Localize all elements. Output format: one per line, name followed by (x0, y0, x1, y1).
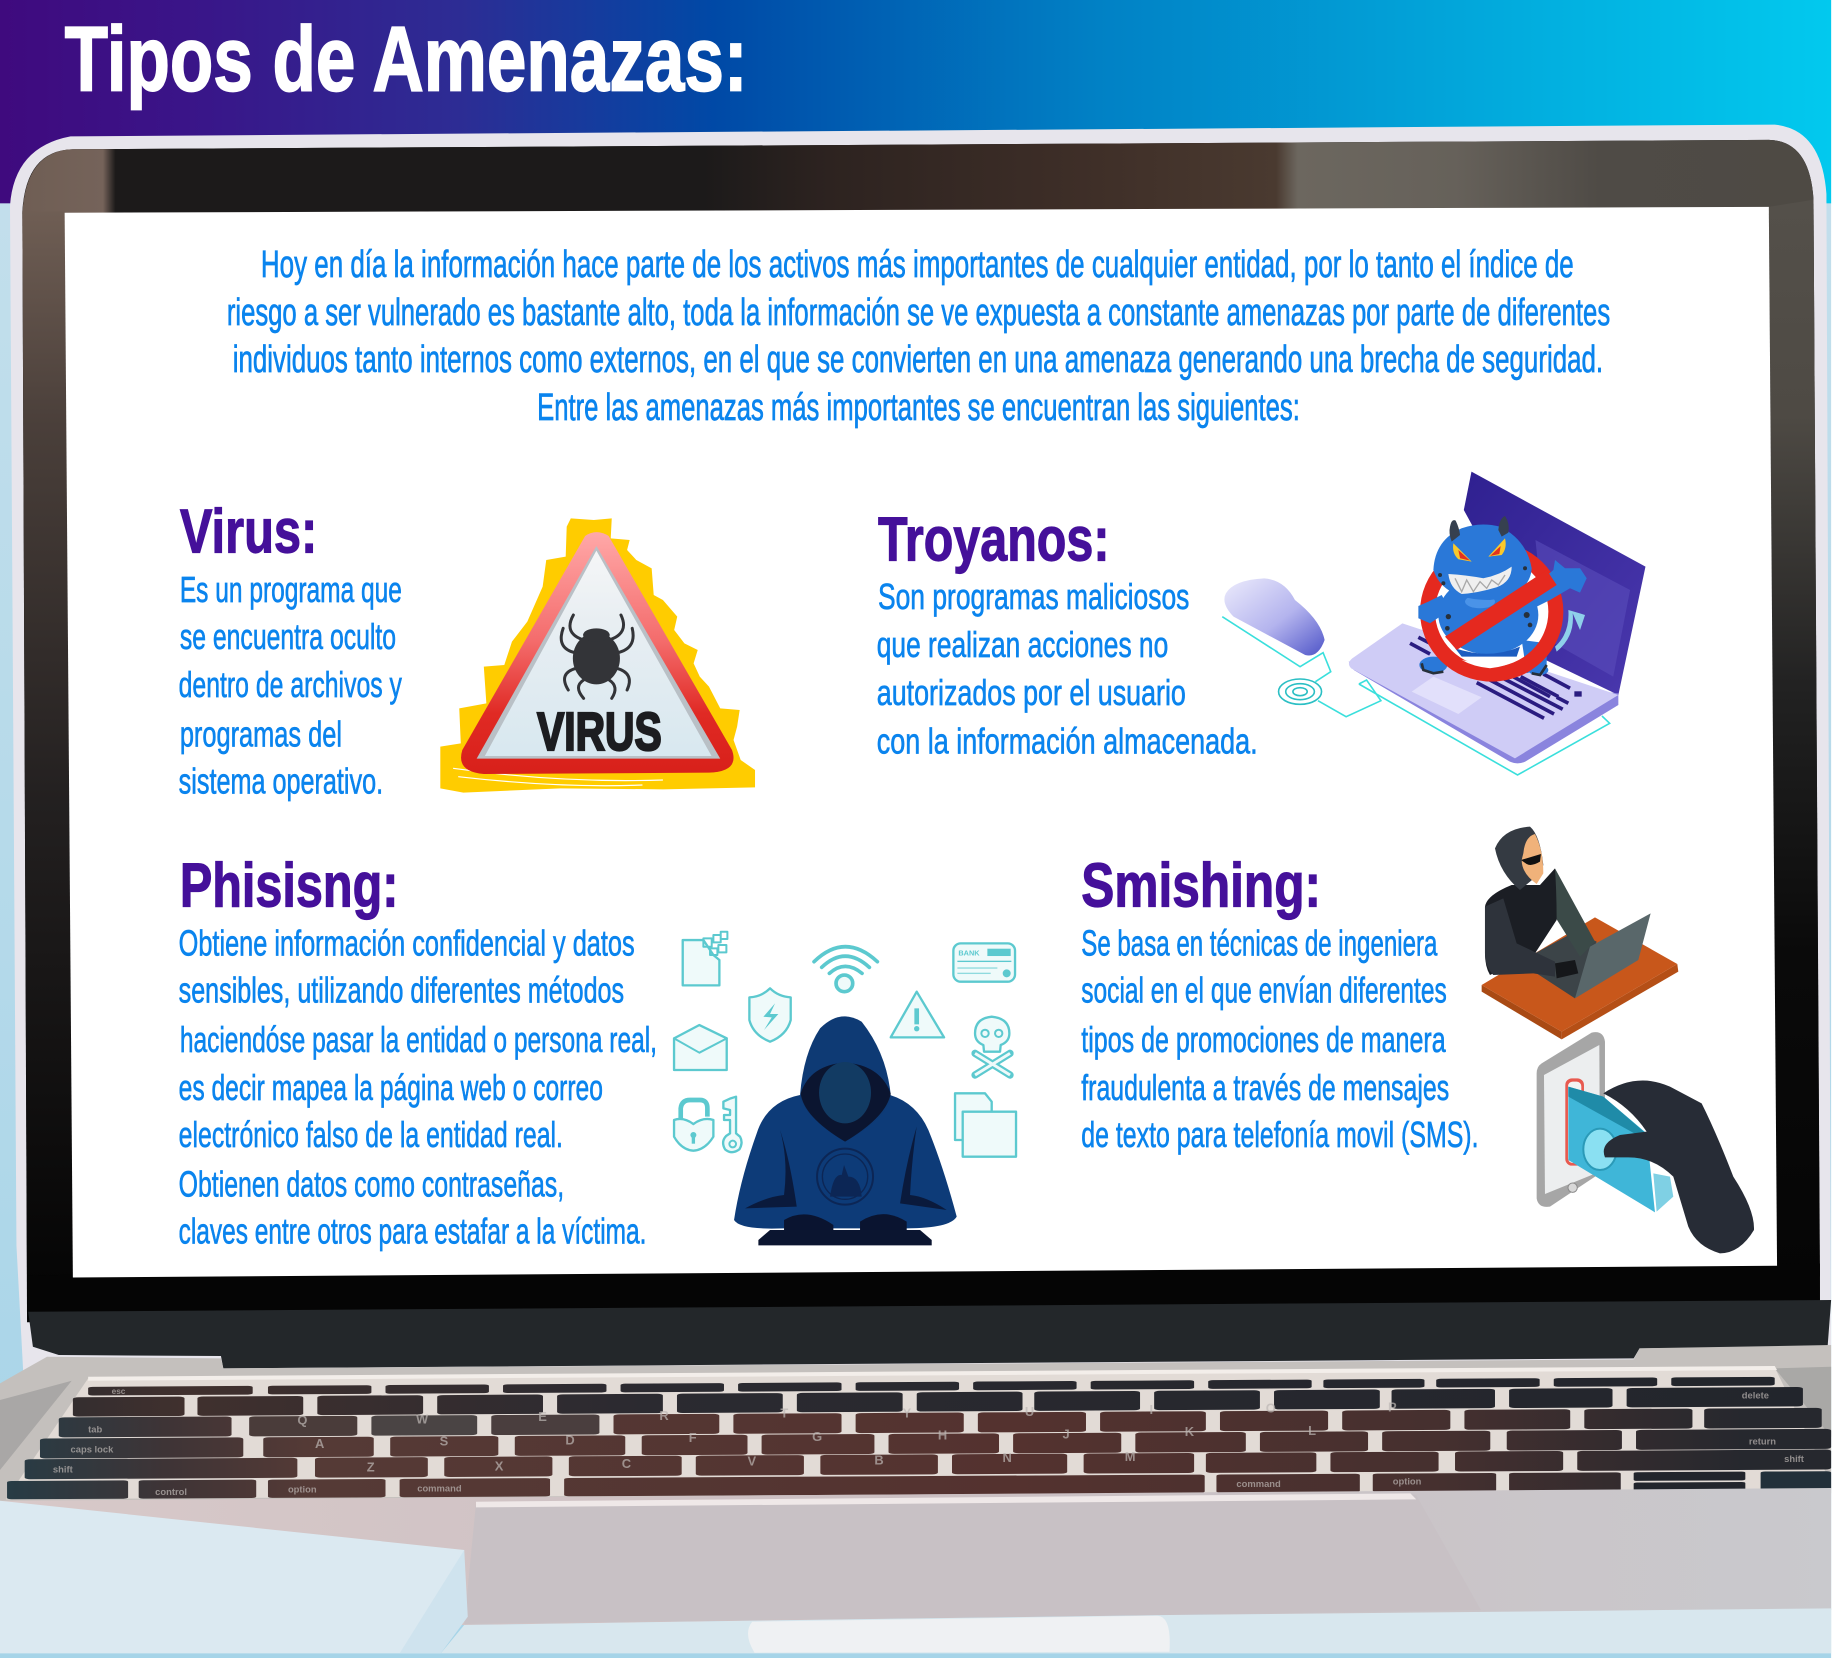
heading: virus: Virus: (180, 497, 317, 566)
keyboard letters: delete (1742, 1390, 1769, 1401)
text: troyanos description: Son programas maliciosos (878, 576, 1189, 617)
icon: warning (891, 992, 944, 1037)
text: virus description: se encuentra oculto (180, 616, 396, 657)
keyboard letters: C (622, 1456, 631, 1471)
heading: smishing: Smishing: (1081, 852, 1321, 921)
icon: pixels (703, 932, 727, 955)
text: virus description: programas del (180, 713, 342, 754)
text: smishing description: tipos de promociones de manera (1081, 1019, 1446, 1060)
legs and feet (1419, 657, 1447, 673)
text: troyanos description (877, 576, 1258, 761)
text: virus description: Es un programa que (180, 569, 402, 610)
keyboard letters: option (288, 1484, 317, 1495)
keyboard letters: V (747, 1454, 756, 1469)
text: virus description: sistema operativo. (179, 760, 383, 801)
panel: smishing (1081, 827, 1754, 1253)
bottom key row (7, 1471, 1831, 1499)
eyes (1453, 543, 1472, 562)
desk surface right (441, 1608, 1831, 1653)
trackpad highlight (476, 1493, 1416, 1507)
ring lower overlap (1462, 660, 1518, 668)
right arm and claws (1523, 560, 1587, 610)
bezel right reflection (1769, 200, 1820, 1276)
keyboard letters: Z (367, 1459, 375, 1474)
left arm (1418, 595, 1450, 623)
text: troyanos description: autorizados por el usuario (877, 672, 1186, 713)
keyboard letters: S (440, 1434, 449, 1449)
white screen panel (65, 207, 1777, 1278)
icon: hacker at desk (1482, 827, 1678, 1039)
keyboard letters: command (1236, 1478, 1281, 1489)
keyboard letters: P (1388, 1400, 1397, 1415)
qwerty row (59, 1408, 1822, 1437)
keyboard letters: O (1266, 1401, 1276, 1416)
intro text (227, 243, 1610, 428)
icon: skull and crossbones (975, 1017, 1010, 1075)
text: smishing description: de texto para telefonía movil (SMS). (1081, 1114, 1479, 1155)
hacker figure (734, 1016, 957, 1245)
head (1433, 524, 1532, 600)
laptop lid frame (10, 125, 1831, 1377)
text: troyanos description: que realizan acciones no (877, 624, 1168, 665)
teeth (1448, 567, 1512, 594)
text: virus description (179, 569, 402, 801)
ring (1420, 542, 1563, 682)
text: phishing description: Obtienen datos como contraseñas, (179, 1163, 564, 1204)
icon: infected laptop with trojan monster (1222, 472, 1645, 775)
keyboard letters: K (1185, 1424, 1195, 1439)
icon: key (723, 1097, 742, 1152)
spots (1438, 566, 1532, 631)
heading: troyanos: Troyanos: (878, 506, 1109, 575)
text: virus description: dentro de archivos y (179, 664, 402, 705)
tail (1555, 610, 1585, 652)
bottom bezel (27, 1263, 1820, 1314)
text: smishing description: fraudulenta a través de mensajes (1081, 1067, 1449, 1108)
keyboard letters: esc (112, 1387, 126, 1396)
keyboard letters: control (155, 1486, 187, 1497)
trackpad (464, 1495, 1481, 1624)
icon: shield (749, 988, 791, 1042)
thumb notch (748, 1616, 1170, 1653)
keyboard letters: L (1308, 1423, 1316, 1438)
keyboard letters: Q (297, 1412, 307, 1427)
keyboard letters: M (1125, 1449, 1136, 1464)
horns (1449, 520, 1460, 542)
text: phishing description: Obtiene información confidencial y datos (179, 923, 635, 964)
speaker grille left (0, 1381, 72, 1470)
icon: document (683, 940, 719, 985)
icon: padlock (674, 1100, 713, 1151)
keyboard letters: N (1003, 1450, 1012, 1465)
text: phishing description: haciendóse pasar la entidad o persona real, (180, 1019, 657, 1060)
laptop base and keyboard (0, 1345, 1831, 1653)
number row (73, 1387, 1803, 1417)
ring backing (1425, 545, 1558, 678)
keyboard letters: return (1749, 1435, 1776, 1446)
keyboard letters: R (659, 1408, 669, 1423)
header gradient band (0, 0, 1831, 203)
notebook side (400, 1550, 468, 1653)
keyboard letters: J (1062, 1427, 1070, 1442)
heading: phisisng: Phisisng: (180, 852, 398, 921)
text: smishing description: Se basa en técnicas de ingeniera (1081, 923, 1438, 964)
keyboard letters: G (812, 1429, 822, 1444)
shift row (25, 1450, 1831, 1479)
keyboard letters: command (417, 1482, 462, 1493)
function row (88, 1377, 1775, 1396)
text: phishing description: claves entre otros para estafar a la víctima. (179, 1210, 646, 1251)
keyboard letters: caps lock (71, 1444, 114, 1455)
text: phishing description: sensibles, utilizando diferentes métodos (179, 970, 624, 1011)
keyboard letters: B (874, 1452, 884, 1467)
keyboard top highlight (88, 1366, 1777, 1381)
keyboard letters: D (565, 1432, 575, 1447)
icon: bank card (953, 943, 1015, 982)
text: phishing description (179, 923, 657, 1251)
panel: phishing (179, 852, 1016, 1251)
icon: virus warning sign (440, 518, 755, 793)
palm rest (0, 1488, 1831, 1625)
hinge (28, 1300, 1831, 1368)
icon: phone with money and hand (1537, 1032, 1754, 1253)
keyboard letters: I (1149, 1402, 1153, 1417)
keyboard letters: X (495, 1458, 504, 1473)
keyboard letters: Y (903, 1405, 912, 1420)
keyboard tray (6, 1367, 1831, 1499)
panel: troyanos (877, 472, 1645, 775)
panel: virus (179, 497, 755, 801)
icon: wifi (814, 947, 877, 992)
keyboard letters: tab (88, 1424, 102, 1435)
icon: virus warning sign: VIRUS (537, 702, 662, 762)
keyboard letters: shift (53, 1464, 74, 1475)
laptop bezel (22, 140, 1820, 1322)
text: phishing description: es decir mapea la página web o correo (179, 1067, 603, 1108)
keyboard letters: U (1025, 1404, 1034, 1419)
keyboard letters: W (416, 1411, 429, 1426)
home row (40, 1429, 1831, 1458)
prohibition bar (1445, 570, 1557, 650)
bezel left reflection (22, 212, 73, 1281)
icon: bank card: BANK (958, 948, 980, 957)
keyboard letters (53, 1387, 1805, 1497)
icon: envelope (674, 1025, 727, 1070)
intro text: Entre las amenazas más importantes se encuentran las siguientes: (537, 386, 1300, 428)
icon: hacker with threat icons (674, 932, 1016, 1245)
text: smishing description (1081, 923, 1479, 1155)
notebook on desk (0, 1501, 464, 1653)
keyboard letters: A (315, 1436, 324, 1451)
text: troyanos description: con la información almacenada. (877, 720, 1258, 761)
bezel top reflection (22, 140, 1813, 214)
speaker grille right (1775, 1367, 1831, 1437)
title: Tipos de Amenazas: (65, 8, 747, 110)
text: smishing description: social en el que envían diferentes (1081, 970, 1447, 1011)
keyboard letters: H (938, 1428, 947, 1443)
keyboard letters: E (538, 1409, 547, 1424)
text: phishing description: electrónico falso de la entidad real. (179, 1114, 563, 1155)
icon: folders (955, 1093, 1016, 1157)
keyboard letters: F (689, 1430, 697, 1445)
keyboard letters: option (1393, 1475, 1422, 1486)
base silver top (0, 1345, 1831, 1503)
keyboard letters: shift (1784, 1453, 1805, 1464)
body (1438, 576, 1538, 654)
keyboard letters: T (780, 1405, 788, 1420)
